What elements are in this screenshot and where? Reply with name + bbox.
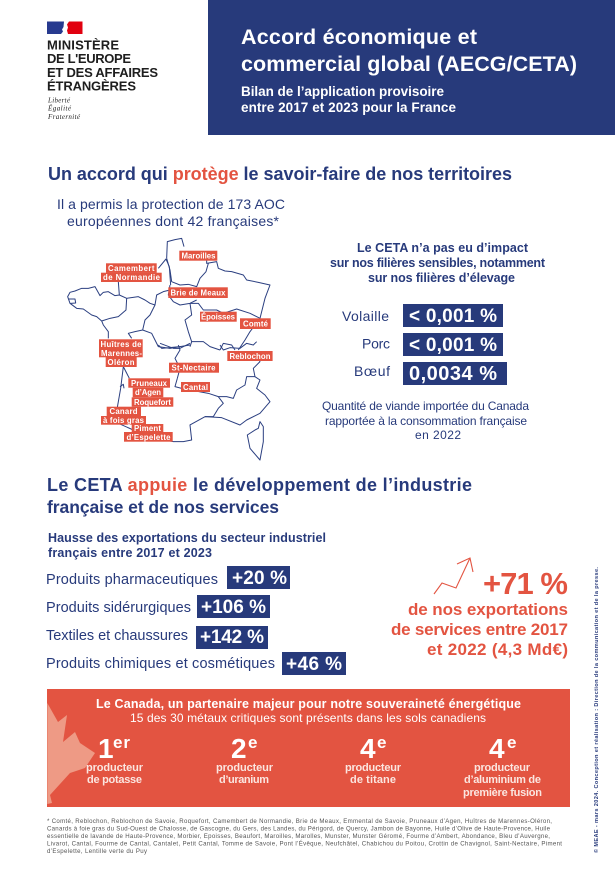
stat: uranium: e xyxy=(248,733,257,752)
stat: uranium: 2 xyxy=(231,733,247,764)
logo: ministry: MINISTÈRE xyxy=(47,38,119,52)
text: AOC protection xyxy=(57,196,285,229)
map labels: à fois gras xyxy=(103,416,145,425)
text: meat caption: rapportée à la consommation française xyxy=(325,414,527,428)
map labels: Brie de Meaux xyxy=(170,288,226,298)
callout: services exports: et 2022 (4,3 Md€) xyxy=(427,640,568,659)
stat: aluminium: e xyxy=(507,733,516,752)
subtitle: Bilan de l’application provisoire xyxy=(241,84,444,99)
row: sidérurgiques: +106 % xyxy=(201,597,266,618)
stat: aluminium: producteur xyxy=(474,762,531,774)
text: AOC protection: Il a permis la protection de 173 AOC xyxy=(57,196,285,212)
title: commercial global (AECG/CETA) xyxy=(241,52,577,76)
stat: titane: 4 xyxy=(360,733,376,764)
row: sidérurgiques xyxy=(46,595,270,618)
logo: ministry: Fraternité xyxy=(47,113,81,121)
stat: potasse xyxy=(86,733,144,786)
map labels: St-Nectaire xyxy=(172,364,216,372)
map labels: Pruneaux xyxy=(131,379,168,388)
logo: ministry: Liberté xyxy=(47,96,71,104)
callout: services exports: +71 % xyxy=(483,566,568,601)
stat: uranium: producteur xyxy=(216,762,274,774)
stat: titane: producteur xyxy=(345,762,402,774)
map labels: d’Espelette xyxy=(126,433,171,442)
row: chimiques: +46 % xyxy=(286,654,342,675)
credit: vertical copyright: © MEAE - mars 2024. Conception et réalisation : Direction de la communication et de la presse. xyxy=(593,567,600,853)
subtitle xyxy=(241,84,456,115)
heading: industry xyxy=(47,475,472,517)
text: AOC protection: européennes dont 42 françaises* xyxy=(67,213,280,229)
row: Bœuf xyxy=(354,362,507,385)
row: textiles xyxy=(46,626,268,649)
logo: ministry: ET DES AFFAIRES xyxy=(47,65,158,80)
stat: titane xyxy=(345,733,402,786)
stat: titane: e xyxy=(377,733,386,752)
subheading: industrial exports xyxy=(48,531,326,560)
stat: potasse: producteur xyxy=(86,762,144,774)
map labels: Oléron xyxy=(108,358,135,367)
row: pharmaceutiques: +20 % xyxy=(232,568,287,589)
row: Bœuf: Bœuf xyxy=(354,363,390,379)
heading: industry: Le CETA appuie le développement de l’industrie xyxy=(47,475,472,495)
text: meat caption: en 2022 xyxy=(415,428,461,442)
export list xyxy=(46,566,346,675)
stat: potasse: er xyxy=(113,733,130,752)
row: chimiques xyxy=(46,652,346,675)
row: chimiques: Produits chimiques et cosmétiques xyxy=(46,656,275,672)
heading: industry: française et de nos services xyxy=(47,497,279,517)
stat: aluminium xyxy=(463,733,542,799)
row: Bœuf: 0,0034 % xyxy=(409,363,497,385)
logo: ministry: ÉTRANGÈRES xyxy=(47,78,136,94)
footnote: essentielle de lavande de Haute-Provence, Morbier, Epoisses, Beaufort, Maroilles, Marolles, Munster, Munster Géromé, Fourme d’Ambert, Abondance, Bleu d’Auvergne, xyxy=(47,833,550,840)
text: no impact on sensitive sectors: sur nos filières sensibles, notamment xyxy=(330,256,546,270)
stat: uranium: d’uranium xyxy=(219,774,269,786)
stat: aluminium: d’aluminium de xyxy=(464,774,541,786)
row: textiles: Textiles et chaussures xyxy=(46,628,188,644)
footnote: Canards à foie gras du Sud-Ouest de Chalosse, de Gascogne, du Gers, des Landes, du Périgord, de Quercy, Jambon de Bayonne, Huile d’Olive de Haute-Provence, Huile xyxy=(47,826,551,832)
stat: potasse: 1 xyxy=(98,733,114,764)
stat: aluminium: 4 xyxy=(489,733,505,764)
text: no impact on sensitive sectors: sur nos filières d’élevage xyxy=(368,271,515,285)
map labels: Canard xyxy=(110,407,138,416)
stat: potasse: de potasse xyxy=(87,774,142,786)
icon: maple leaf xyxy=(47,703,95,804)
row: pharmaceutiques xyxy=(46,566,290,589)
row: sidérurgiques: Produits sidérurgiques xyxy=(46,600,191,616)
panel subtitle: 15 des 30 métaux critiques sont présents dans les sols canadiens xyxy=(130,711,486,725)
icon: rising arrow xyxy=(434,558,473,594)
map labels: Marennes- xyxy=(101,349,142,358)
footnote: d’Espelette, Lentille verte du Puy xyxy=(47,848,148,855)
stat: titane: de titane xyxy=(350,774,396,786)
map labels: Époisses xyxy=(201,312,236,322)
callout: services exports xyxy=(391,566,568,659)
icon: French flag xyxy=(47,22,82,34)
text: meat caption: Quantité de viande importée du Canada xyxy=(322,399,529,413)
panel title: Le Canada, un partenaire majeur pour notre souveraineté énergétique xyxy=(96,697,521,711)
text: no impact on sensitive sectors xyxy=(330,241,546,285)
callout: services exports: de services entre 2017 xyxy=(391,620,568,639)
text: meat caption xyxy=(322,399,529,442)
map labels xyxy=(99,251,273,442)
callout: services exports: de nos exportations xyxy=(408,600,568,619)
map labels: d’Agen xyxy=(135,388,161,397)
title: Accord économique et xyxy=(241,25,477,49)
heading: protection: Un accord qui protège le savoir-faire de nos territoires xyxy=(48,164,512,184)
title xyxy=(241,25,577,76)
map outline xyxy=(68,238,270,460)
subtitle: entre 2017 et 2023 pour la France xyxy=(241,100,456,115)
panel: Canada energy sovereignty xyxy=(47,689,570,807)
footnote xyxy=(47,818,562,855)
map labels: Camembert xyxy=(108,264,155,273)
row: Porc: Porc xyxy=(362,336,390,352)
row: Volaille: Volaille xyxy=(342,308,389,324)
logo: ministry: DE L'EUROPE xyxy=(47,51,131,66)
footnote: * Comté, Reblochon, Reblochon de Savoie, Roquefort, Camembert de Normandie, Brie de Meaux, Emmental de Savoie, Pruneaux d’Agen, Huîtres de Marennes-Oléron, xyxy=(47,818,552,825)
stat table: meat imports xyxy=(342,304,507,385)
row: Porc: < 0,001 % xyxy=(409,335,497,356)
map: France with AOC labels xyxy=(68,238,273,460)
row: Volaille xyxy=(342,304,503,327)
map labels: Huîtres de xyxy=(100,340,142,349)
logo: ministry xyxy=(47,22,158,121)
map labels: Maroilles xyxy=(182,251,216,260)
map labels: Piment xyxy=(134,424,161,433)
map labels: Reblochon xyxy=(230,352,271,361)
stat: aluminium: première fusion xyxy=(463,787,542,799)
row: Porc xyxy=(362,333,503,356)
header banner xyxy=(208,0,615,135)
row: textiles: +142 % xyxy=(200,627,264,648)
subheading: industrial exports: Hausse des exportations du secteur industriel xyxy=(48,531,326,545)
subheading: industrial exports: français entre 2017 et 2023 xyxy=(48,546,212,560)
map labels: Roquefort xyxy=(134,398,171,407)
stat: uranium xyxy=(216,733,274,786)
logo: ministry: Égalité xyxy=(47,104,72,112)
text: no impact on sensitive sectors: Le CETA n’a pas eu d’impact xyxy=(357,241,529,255)
map labels: de Normandie xyxy=(103,273,161,282)
footnote: Livarot, Cantal, Fourme de Cantal, Cantalet, Petit Cantal, Tomme de Savoie, Pont l’Évêque, Neufchâtel, Chabichou du Poitou, Crottin de Chavignol, Saint-Nectaire, Piment xyxy=(47,840,562,848)
map labels: Comté xyxy=(243,320,269,328)
map labels: Cantal xyxy=(183,383,208,392)
row: Volaille: < 0,001 % xyxy=(409,306,497,327)
row: pharmaceutiques: Produits pharmaceutiques xyxy=(46,572,218,588)
